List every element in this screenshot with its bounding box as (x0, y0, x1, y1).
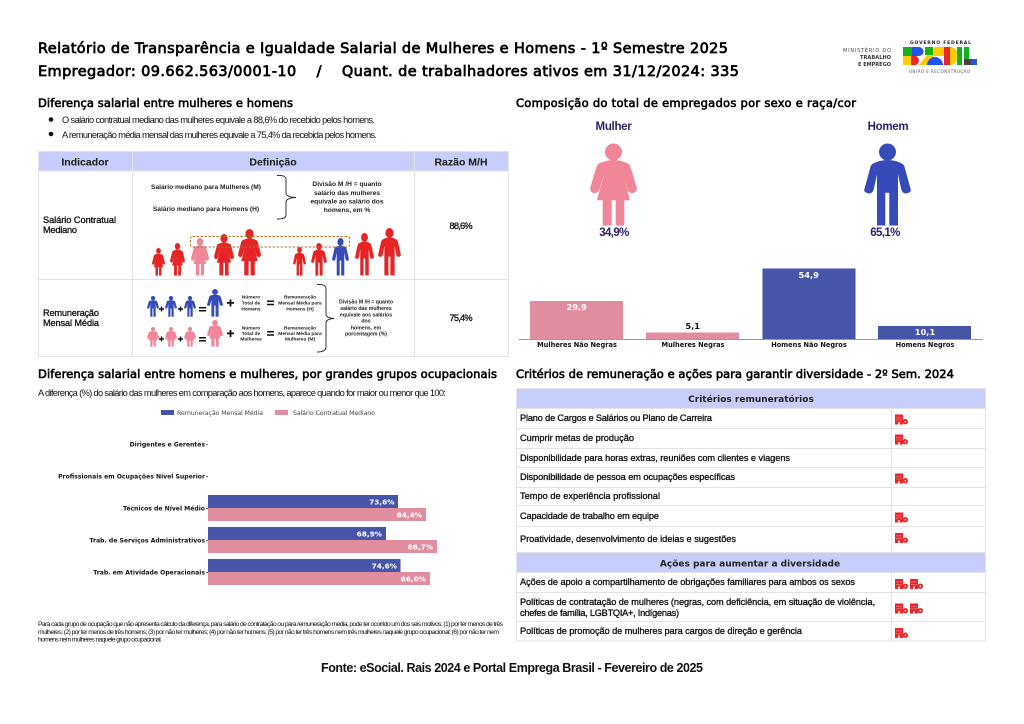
panel: critérios e ações: Tempo de experiência profissional (520, 491, 660, 501)
linha: remuneração mensal média: Mensal Média para (278, 300, 322, 306)
linha: remuneração mensal média: dos (361, 318, 371, 324)
linha: remuneração mensal média: Remuneração (284, 294, 316, 300)
bar chart: grupos ocupacionais: 88,7% (408, 542, 434, 552)
bar chart: grupos ocupacionais: Técnicos de Nível Médio (123, 504, 205, 512)
linha: remuneração mensal média: Número (242, 294, 260, 300)
panel: critérios e ações: Políticas de promoção de mulheres para cargos de direção e gerência (520, 626, 803, 636)
linha: salário contratual mediano: Divisão M /H = quanto (312, 181, 382, 188)
linha: remuneração mensal média: Mensal Média para (278, 331, 322, 337)
title (38, 41, 739, 80)
heading: composição: Composição do total de empregados por sexo e raça/cor (516, 96, 856, 110)
bar chart: composição por raça/cor (519, 268, 983, 349)
panel: critérios e ações: chefes de família, LGBTQIA+, Indígenas) (520, 608, 679, 618)
linha: salário contratual mediano: Mediano (43, 225, 77, 235)
panel: critérios e ações: Ações de apoio a compartilhamento de obrigações familiares para ambos os sexos (520, 577, 855, 587)
linha: salário contratual mediano: salário das mulheres (314, 190, 380, 197)
bar chart: grupos ocupacionais: Dirigentes e Gerentes (130, 442, 205, 448)
panel: critérios e ações: Capacidade de trabalho em equipe (520, 511, 659, 521)
panel: critérios e ações: Plano de Cargos e Salários ou Plano de Carreira (520, 413, 713, 423)
bullet list: A remuneração média mensal das mulheres equivale a 75,4% da recebida pelos homens. (62, 130, 377, 140)
bar chart: composição por raça/cor: 10,1 (915, 327, 935, 337)
panel: critérios e ações: Critérios remuneratórios (688, 394, 814, 405)
title: Empregador: 09.662.563/0001-10 / Quant. de trabalhadores ativos em 31/12/2024: 335 (38, 64, 739, 80)
legend (161, 409, 375, 417)
panel: critérios e ações: Disponibilidade para horas extras, reuniões com clientes e viagens (520, 453, 790, 463)
linha: remuneração mensal média: homens, em (351, 326, 382, 332)
linha: remuneração mensal média: Homens (241, 306, 261, 312)
panel: tabela de indicadores: Indicador (61, 156, 109, 168)
source: Fonte: eSocial. Rais 2024 e Portal Emprega Brasil - Fevereiro de 2025 (321, 661, 703, 675)
linha: remuneração mensal média: Mulheres (M) (285, 336, 315, 342)
linha: remuneração mensal média: Mensal Média (43, 318, 100, 328)
icon: homem 65,1%: Homem (868, 121, 908, 133)
linha: remuneração mensal média: Remuneração (284, 326, 316, 332)
linha: remuneração mensal média: Número (242, 326, 260, 332)
bar chart: composição por raça/cor: Homens Negros (896, 341, 954, 349)
bullet list: O salário contratual mediano das mulheres equivale a 88,6% do recebido pelos homens. (62, 115, 375, 125)
bar chart: grupos ocupacionais: Trab. em Atividade Operacionais (93, 570, 205, 576)
linha: remuneração mensal média: 75,4% (450, 313, 472, 323)
footnote (38, 621, 504, 644)
linha: salário contratual mediano: Salário mediano para Mulheres (M) (151, 184, 261, 191)
linha: remuneração mensal média: Divisão M /H = quanto (339, 300, 393, 306)
footnote: Para cada grupo de ocupação que não apresenta cálculo da diferença, para salário de contratação ou para remuneração média, pode ter ocorrido um dos seis motivos: (1) por ter menos de três (38, 621, 504, 628)
bar chart: composição por raça/cor: 29,9 (566, 302, 587, 312)
linha: salário contratual mediano (43, 175, 472, 276)
linha: remuneração mensal média: porcentagem (%) (345, 332, 387, 338)
panel: tabela de indicadores (38, 151, 508, 357)
logo: ministério e governo federal: UNIÃO E RECONSTRUÇÃO (909, 69, 970, 74)
panel: tabela de indicadores: Razão M/H (434, 156, 488, 168)
bar chart: composição por raça/cor: 5,1 (685, 321, 700, 331)
linha: remuneração mensal média: salário das mulheres (340, 306, 392, 312)
logo: ministério e governo federal: TRABALHO (860, 55, 891, 61)
panel: critérios e ações: Ações para aumentar a diversidade (660, 560, 840, 570)
panel: tabela de indicadores: Definição (249, 156, 297, 168)
footnote: mulheres; (2) por ter menos de três homens; (3) por não ter mulheres; (4) por não ter homens; (5) por não ter três homens nem três mulheres naquele grupo ocupacional; (6) por não ter nem (38, 629, 499, 636)
bar chart: grupos ocupacionais: 84,4% (397, 510, 423, 520)
linha: remuneração mensal média: Total de (242, 300, 260, 306)
bar chart: grupos ocupacionais: 68,9% (357, 530, 383, 538)
logo: ministério e governo federal (843, 40, 977, 74)
bar chart: grupos ocupacionais: 74,6% (372, 562, 398, 570)
panel: critérios e ações: Políticas de contratação de mulheres (negras, com deficiência, em situação de violência, (520, 597, 875, 607)
legend: Remuneração Mensal Média (177, 409, 263, 417)
heading: diferença salarial: Diferença salarial entre mulheres e homens (38, 96, 293, 110)
linha: remuneração mensal média (43, 284, 472, 352)
panel: critérios e ações: Proatividade, desenvolvimento de ideias e sugestões (520, 534, 736, 544)
linha: salário contratual mediano: Salário Contratual (43, 215, 116, 225)
bar chart: composição por raça/cor: Mulheres Negras (662, 341, 725, 349)
bar chart: composição por raça/cor: Homens Não Negros (771, 341, 847, 349)
heading: critérios: Critérios de remuneração e ações para garantir diversidade - 2º Sem. 2024 (516, 367, 954, 381)
icon: mulher 34,9%: 34,9% (599, 227, 629, 239)
linha: remuneração mensal média: Homens (H) (286, 306, 314, 312)
subtitle: A diferença (%) do salário das mulheres em comparação aos homens, aparece quando for maior ou menor que 100: (38, 388, 446, 398)
panel: critérios e ações (516, 388, 986, 641)
bar chart: grupos ocupacionais (58, 442, 437, 585)
panel: critérios e ações: Cumprir metas de produção (520, 433, 634, 443)
footnote: homens nem mulheres naquele grupo ocupacional. (38, 636, 162, 644)
logo: ministério e governo federal: E EMPREGO (858, 62, 891, 68)
panel: critérios e ações: Disponibilidade de pessoa em ocupações específicas (520, 472, 735, 482)
linha: salário contratual mediano: homens, em % (324, 207, 370, 214)
bar chart: grupos ocupacionais: Trab. de Serviços Administrativos (89, 538, 205, 544)
bar chart: grupos ocupacionais: Profissionais em Ocupações Nível Superior (58, 472, 205, 480)
title: Relatório de Transparência e Igualdade Salarial de Mulheres e Homens - 1º Semestre 2025 (38, 41, 728, 57)
linha: salário contratual mediano: equivale ao salário dos (310, 198, 384, 206)
bar chart: composição por raça/cor: Mulheres Não Negras (537, 341, 617, 349)
logo: ministério e governo federal: MINISTÉRIO DO (843, 46, 891, 54)
linha: salário contratual mediano: Salário mediano para Homens (H) (153, 206, 259, 213)
legend: Salário Contratual Mediano (293, 409, 375, 417)
bar chart: grupos ocupacionais: 73,6% (369, 498, 395, 506)
icon: mulher 34,9%: Mulher (596, 121, 632, 133)
linha: salário contratual mediano: 88,6% (450, 221, 472, 231)
bullet list (49, 115, 377, 140)
bar chart: composição por raça/cor: 54,9 (798, 270, 819, 280)
bar chart: grupos ocupacionais: 86,0% (401, 574, 427, 584)
icon: mulher 34,9% (590, 121, 637, 239)
heading: diferença por grupos ocupacionais: Diferença salarial entre homens e mulheres, por grandes grupos ocupacionais (38, 367, 497, 381)
icons: empresas (895, 414, 923, 638)
linha: remuneração mensal média: Mulheres (240, 336, 262, 342)
linha: remuneração mensal média: Total de (242, 331, 260, 337)
icon: homem 65,1% (864, 121, 911, 239)
linha: remuneração mensal média: equivale aos salários (340, 312, 392, 318)
icon: homem 65,1%: 65,1% (870, 227, 900, 239)
logo: ministério e governo federal: GOVERNO FEDERAL (910, 40, 971, 46)
linha: remuneração mensal média: Remuneração (43, 308, 99, 318)
